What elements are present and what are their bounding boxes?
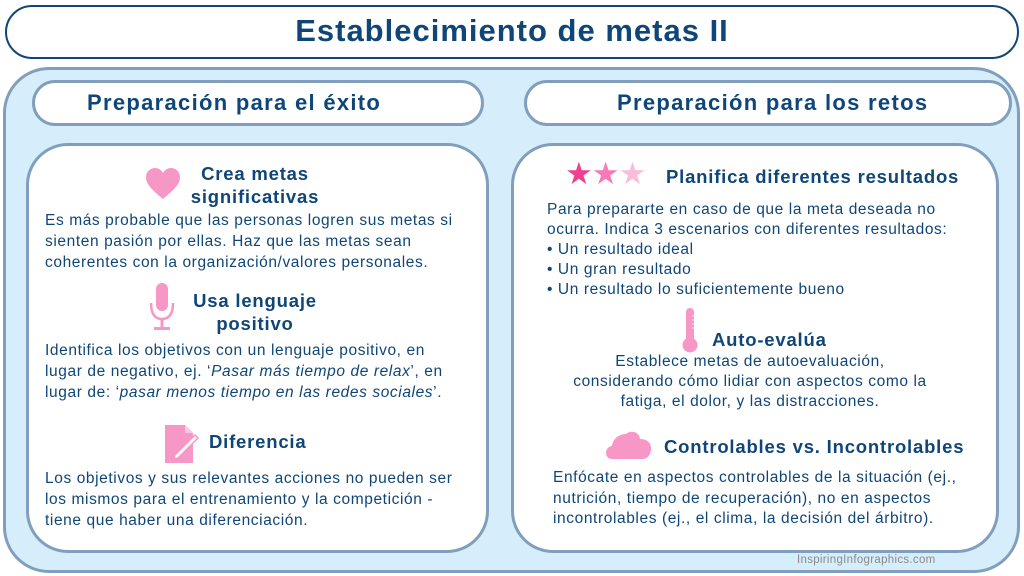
text: planifica: • Un gran resultado [547, 261, 691, 278]
text: controlables: nutrición, tiempo de recuperación), no en aspectos [553, 490, 931, 506]
panel header: left [32, 80, 484, 126]
text: planifica: • Un resultado lo suficientemente bueno [547, 281, 845, 298]
text: planifica: Para prepararte en caso de que la meta deseada no [547, 201, 936, 218]
icon: thermometer [682, 308, 698, 352]
heading: usa lenguaje [193, 290, 317, 334]
icon: edit document [165, 425, 199, 463]
text: lenguaje positivo: lugar de negativo, ej. ‘Pasar más tiempo de relax’, en [45, 363, 443, 380]
text: lenguaje positivo: Identifica los objetivos con un lenguaje positivo, en [45, 342, 425, 359]
text: planifica [547, 201, 947, 298]
heading: diferencia: Diferencia [209, 431, 306, 452]
text: auto-evalua: fatiga, el dolor, y las distracciones. [621, 393, 879, 410]
heading: crea metas [191, 163, 319, 207]
title: Establecimiento de metas II [295, 13, 729, 48]
text: lenguaje positivo [45, 342, 443, 401]
panel: challenges card [511, 143, 999, 553]
text: auto-evalua: Establece metas de autoevaluación, [615, 353, 885, 370]
text: auto-evalua [573, 353, 927, 410]
title [5, 5, 1019, 59]
panel header: right [524, 80, 1012, 126]
text: lenguaje positivo: lugar de: ‘pasar menos tiempo en las redes sociales’. [45, 384, 442, 401]
heading: crea metas: Crea metas [201, 163, 309, 184]
text: diferencia [45, 470, 452, 529]
text: crea metas: Es más probable que las personas logren sus metas si [45, 212, 453, 229]
text: planifica: • Un resultado ideal [547, 241, 694, 258]
panel header: right: Preparación para los retos [617, 90, 928, 115]
icon: microphone [150, 283, 174, 330]
text: diferencia: los mismos para el entrenamiento y la competición - [45, 491, 433, 508]
heading: auto-evalua: Auto-evalúa [712, 329, 827, 350]
text: controlables: Enfócate en aspectos controlables de la situación (ej., [553, 469, 957, 486]
icon: cloud [606, 432, 652, 459]
watermark: InspiringInfographics.com [797, 554, 936, 566]
heading: controlables: Controlables vs. Incontrolables [664, 436, 964, 457]
text: crea metas: sienten pasión por ellas. Haz que las metas sean [45, 233, 412, 250]
text: controlables: incontrolables (ej., el clima, la decisión del árbitro). [553, 510, 934, 527]
panel: success card [26, 143, 489, 553]
text: controlables [553, 469, 957, 527]
icon: heart [146, 168, 180, 199]
text: crea metas [45, 212, 453, 271]
text: planifica: ocurra. Indica 3 escenarios con diferentes resultados: [547, 221, 947, 238]
text: diferencia: Los objetivos y sus relevantes acciones no pueden ser [45, 470, 452, 487]
heading: crea metas: significativas [191, 186, 319, 207]
icon: stars: ★★★ [565, 156, 645, 191]
heading: usa lenguaje: Usa lenguaje [193, 290, 317, 311]
text: auto-evalua: considerando cómo lidiar con aspectos como la [573, 373, 927, 390]
text: diferencia: tiene que haber una diferenciación. [45, 512, 308, 529]
text: crea metas: coherentes con la organización/valores personales. [45, 254, 428, 271]
heading: usa lenguaje: positivo [216, 313, 294, 334]
heading: planifica: Planifica diferentes resultados [666, 166, 959, 187]
panel header: left: Preparación para el éxito [87, 90, 381, 115]
